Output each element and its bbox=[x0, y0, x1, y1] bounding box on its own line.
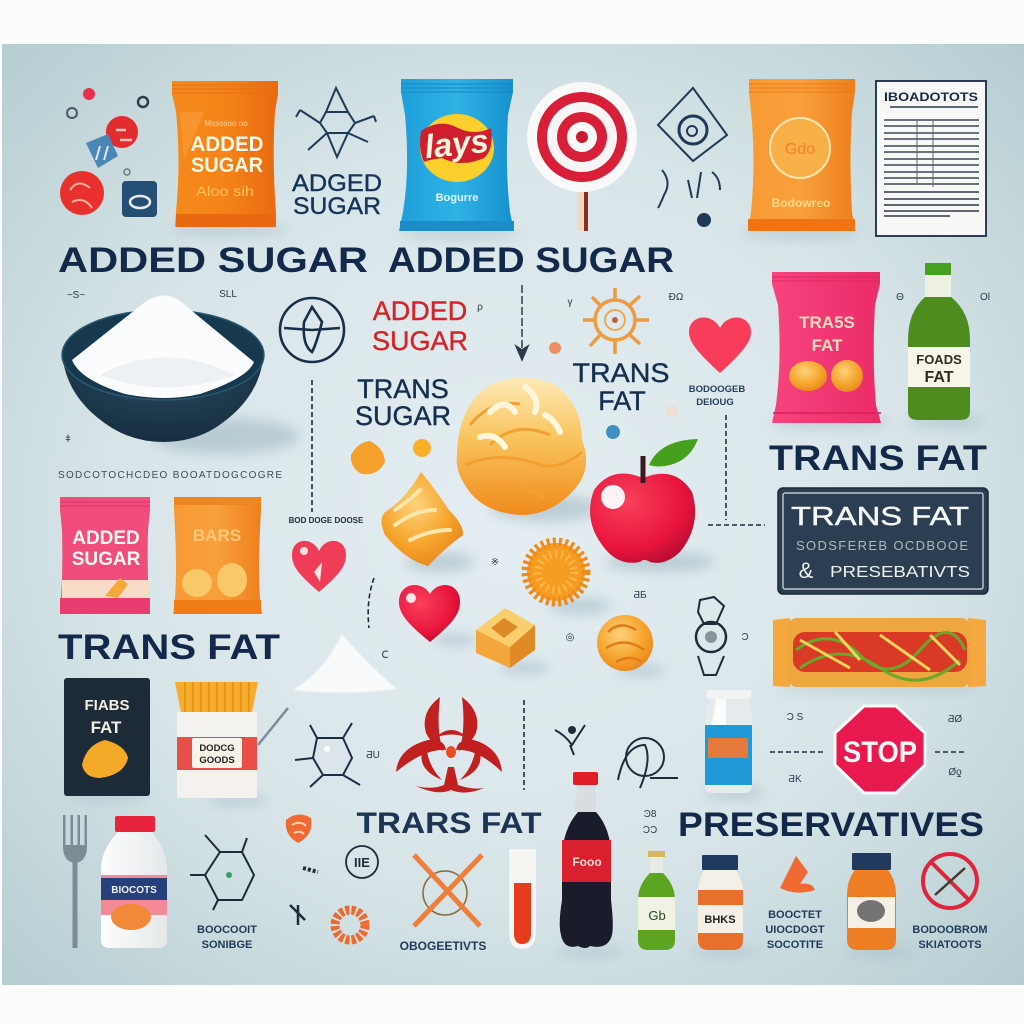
caption: lower left: BOOCOOIT bbox=[197, 924, 257, 936]
jar: orange: BHKS bbox=[704, 914, 736, 926]
caption: lower right: BOOCTET bbox=[768, 909, 822, 921]
small dashed caption: BOD DOGE DOOSE bbox=[289, 516, 364, 525]
snack bag: pink trans fat: FAT bbox=[812, 336, 843, 355]
heading: trans fat left: TRANS FAT bbox=[58, 628, 280, 667]
text: added sugar red: SUGAR bbox=[372, 326, 468, 356]
text: small caption: BODOOGEB bbox=[689, 384, 745, 395]
text: trans sugar bbox=[355, 374, 451, 431]
caption: lower right: UIOCDOGT bbox=[765, 924, 825, 936]
box: trans fat black: FAT bbox=[91, 718, 122, 737]
doodle marks: ◎ bbox=[566, 632, 575, 643]
doodle marks: ƋƂ bbox=[633, 590, 647, 601]
icon: circle squiggle bbox=[618, 738, 678, 788]
icon: circled figure bbox=[280, 298, 344, 362]
snack bag: blue chips: lays bbox=[423, 122, 490, 165]
snack bag: pink added sugar: SUGAR bbox=[72, 549, 141, 570]
snack bag: added sugar orange: ADDED bbox=[190, 133, 264, 156]
snack bag: orange small: BARS bbox=[193, 526, 241, 545]
box: trans fat black bbox=[64, 678, 150, 796]
icon: eye diamond bbox=[658, 88, 727, 226]
small gold nugget bbox=[413, 439, 431, 457]
bottle: milk blue bbox=[705, 690, 752, 793]
cube bbox=[476, 608, 535, 668]
doodle marks: Øƍ bbox=[948, 767, 962, 778]
heading: added sugar left: ADDED SUGAR bbox=[58, 240, 368, 280]
caption: lower left: SONIBGE bbox=[202, 939, 252, 951]
text: added sugar red: ADDED bbox=[373, 296, 467, 326]
heading: added sugar right: ADDED SUGAR bbox=[388, 240, 674, 280]
caption: far right bbox=[912, 924, 988, 951]
sign: trans fat preservatives: SODSFEREB OCDBOOE bbox=[796, 538, 968, 553]
text: added sugar red bbox=[372, 296, 468, 356]
small green bottle bbox=[638, 851, 675, 950]
text: trans sugar: TRANS bbox=[357, 374, 449, 404]
text: trans fat middle bbox=[572, 358, 670, 416]
nugget: triangular bbox=[382, 472, 463, 566]
icon: heart split bbox=[292, 541, 346, 592]
sign: trans fat preservatives bbox=[778, 488, 988, 594]
bottle: white supplement bbox=[101, 816, 167, 948]
fried round spiky bbox=[526, 542, 586, 602]
doodle marks: Ͻ S bbox=[787, 712, 804, 723]
doodle marks: ※ bbox=[491, 557, 499, 568]
box: fries: GOODS bbox=[199, 755, 235, 766]
caption: lower right: SOCOTITE bbox=[767, 939, 823, 951]
snack bag: added sugar orange: Mssosoo oo bbox=[204, 119, 248, 128]
icon: biohazard bbox=[396, 697, 502, 793]
doodle marks: ƋØ bbox=[948, 714, 962, 725]
ingredients label sheet bbox=[876, 81, 986, 236]
text: trans sugar: SUGAR bbox=[355, 401, 451, 431]
icon: circled letters bbox=[346, 846, 378, 878]
hex icon lower bbox=[190, 835, 254, 910]
doodle marks: ǂ bbox=[65, 434, 71, 445]
icon: orange figure bbox=[780, 856, 815, 893]
cola bottle: Fooo bbox=[572, 855, 602, 869]
icon: prohibition bbox=[923, 854, 977, 908]
stop sign bbox=[835, 706, 925, 793]
icon: candy scatter bbox=[60, 88, 157, 217]
text: added sugar small: SUGAR bbox=[293, 193, 381, 220]
icon: orange doodles bbox=[286, 814, 365, 940]
icon: crossed food bbox=[414, 855, 482, 926]
icon: sun gear bbox=[583, 288, 649, 354]
caption: objectives: OBOGEETIVTS bbox=[400, 939, 486, 953]
doodle marks: Ͽ8 bbox=[644, 809, 657, 820]
jar: orange bbox=[698, 855, 743, 950]
icon: circled letters: IIE bbox=[354, 855, 370, 870]
icon: small marks bbox=[555, 725, 585, 755]
bottle: green: FAT bbox=[924, 369, 954, 386]
doodle marks bbox=[65, 289, 990, 836]
snack bag: pink trans fat: TRA5S bbox=[799, 313, 855, 332]
text: small caption: DEIOUG bbox=[696, 397, 734, 408]
heart red bbox=[399, 585, 460, 642]
caption bar under bowl: SODCOTOCHCDEO BOOATDOGCOGRE bbox=[58, 470, 282, 481]
box: trans fat black: FIABS bbox=[84, 697, 130, 714]
sign: trans fat preservatives: TRANS FAT bbox=[791, 501, 969, 531]
caption: far right: SKIATOOTS bbox=[918, 939, 982, 951]
ingredients label sheet: IBOADOTOTS bbox=[884, 92, 978, 104]
text: trans fat middle: TRANS bbox=[572, 358, 670, 388]
doodle marks: Ol bbox=[980, 292, 990, 303]
snack bag: added sugar orange bbox=[172, 81, 278, 227]
small nugget bbox=[351, 441, 385, 474]
molecule icon bbox=[296, 88, 376, 157]
small dots bbox=[549, 342, 678, 439]
text: trans fat middle: FAT bbox=[598, 386, 646, 416]
doodle marks: ƋK bbox=[788, 774, 802, 785]
stop sign: STOP bbox=[843, 736, 917, 769]
text: small caption bbox=[689, 384, 745, 408]
doodle marks: ƆƆ bbox=[643, 825, 657, 836]
doodle marks: SLL bbox=[219, 289, 237, 300]
hex molecule bbox=[295, 723, 360, 787]
snack bag: orange right bbox=[748, 79, 855, 231]
bottle: green: FOADS bbox=[916, 352, 962, 367]
spoon stick bbox=[258, 708, 288, 745]
small green bottle: Gb bbox=[648, 908, 666, 923]
icon: target lollipop bbox=[527, 82, 637, 231]
doodle marks: ƋU bbox=[366, 750, 380, 761]
snack bag: orange right: Gdo bbox=[785, 141, 815, 158]
snack bag: pink added sugar bbox=[60, 497, 150, 614]
caption: far right: BODOOBROM bbox=[912, 924, 988, 936]
box: fries bbox=[175, 682, 258, 798]
doodle marks: ÐΩ bbox=[669, 292, 684, 303]
fried dough ball bbox=[457, 378, 586, 515]
doodle marks: ꓚ bbox=[382, 650, 389, 661]
fork bbox=[63, 815, 87, 948]
snack bag: orange small bbox=[173, 497, 262, 614]
text: added sugar small: ADGED bbox=[292, 170, 382, 197]
icon: heart pink bbox=[689, 317, 751, 373]
apple bbox=[590, 439, 698, 563]
jar: amber bbox=[847, 853, 896, 950]
text: added sugar small bbox=[292, 170, 382, 220]
snack bag: orange right: Bodowreo bbox=[772, 196, 830, 210]
snack bag: added sugar orange: SUGAR bbox=[191, 154, 263, 177]
sugar bowl bbox=[62, 296, 264, 442]
sign: trans fat preservatives: & bbox=[799, 558, 814, 583]
bottle: white supplement: BIOCOTS bbox=[111, 885, 157, 896]
hex chain icon bbox=[696, 597, 726, 675]
doodle marks: ρ bbox=[477, 302, 483, 313]
snack bag: added sugar orange: Aloo sih bbox=[196, 183, 254, 199]
sandwich bbox=[773, 618, 986, 687]
snack bag: blue chips: Bogurre bbox=[436, 192, 478, 204]
sign: trans fat preservatives: PRESEBATIVTS bbox=[830, 564, 970, 581]
doodle marks: γ bbox=[568, 297, 572, 308]
dashed connectors bbox=[312, 380, 965, 790]
caption: lower left bbox=[197, 924, 257, 951]
heading: trans fat right: TRANS FAT bbox=[769, 439, 987, 478]
heading: preservatives: PRESERVATIVES bbox=[678, 806, 984, 844]
heading: trans fat lower: TRARS FAT bbox=[356, 807, 542, 840]
doodle marks: Θ bbox=[896, 292, 904, 303]
box: fries: DODCG bbox=[199, 743, 235, 754]
sugar pile bbox=[293, 634, 397, 693]
caption: lower right bbox=[765, 909, 825, 951]
snack bag: pink trans fat bbox=[772, 272, 881, 423]
arrow: down bbox=[516, 285, 528, 360]
bottle: green bbox=[908, 263, 970, 420]
doodle marks: Ɔ bbox=[741, 632, 749, 643]
doodle marks: ~S~ bbox=[67, 290, 85, 301]
cola bottle bbox=[560, 772, 613, 948]
fried ball lower bbox=[597, 615, 653, 671]
snack bag: pink added sugar: ADDED bbox=[72, 528, 140, 549]
test tube bbox=[510, 850, 535, 948]
snack bag: blue chips bbox=[399, 79, 514, 231]
